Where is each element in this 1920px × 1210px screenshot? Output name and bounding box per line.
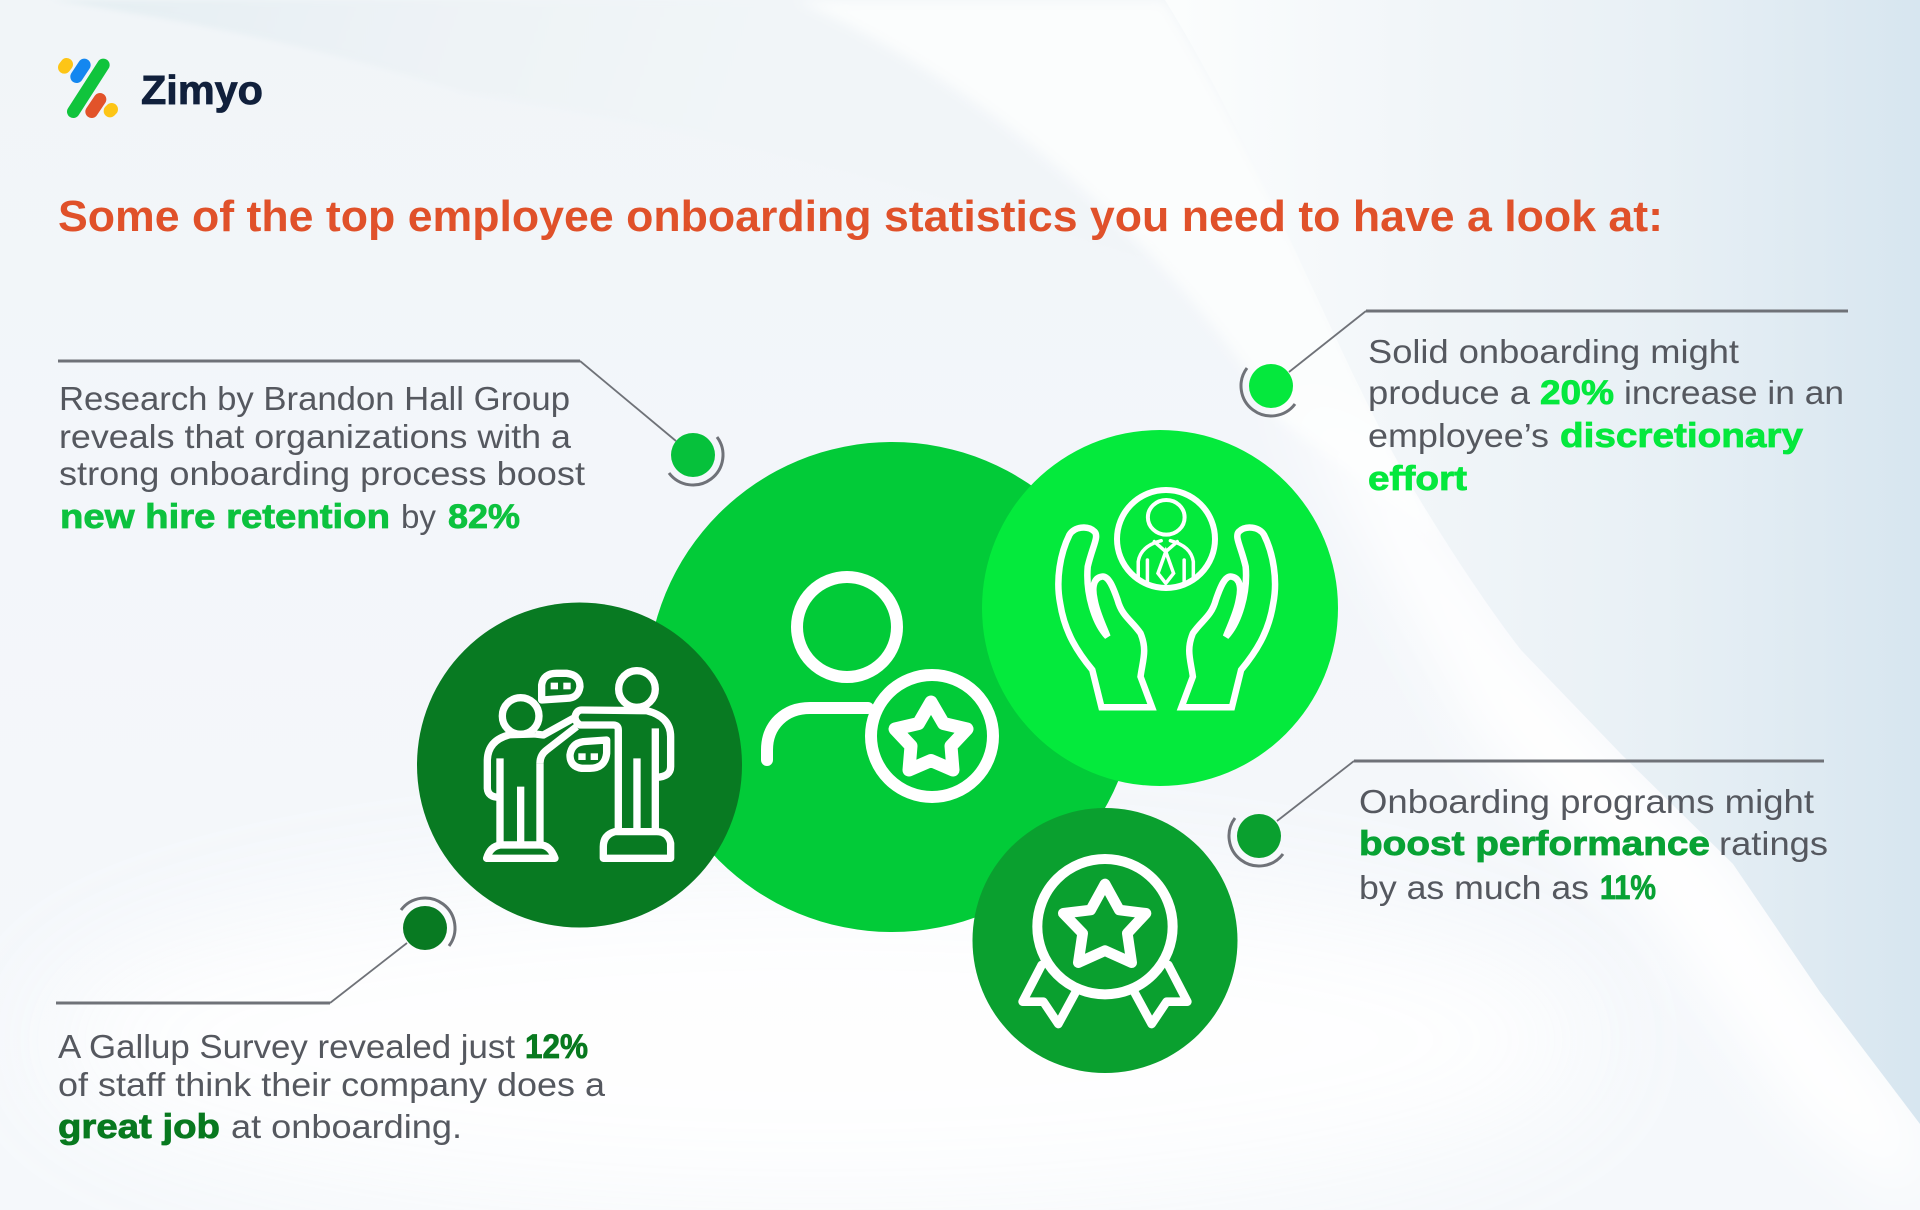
callout text: effort [1368, 460, 1467, 498]
icon: two people talking [487, 671, 671, 858]
callout text: reveals that organizations with a [59, 418, 572, 455]
icon: person with star badge [767, 577, 993, 797]
callout text: great job [58, 1108, 220, 1146]
marker dot [1241, 364, 1295, 416]
callout text: produce a [1368, 374, 1531, 411]
callout text: Solid onboarding might [1368, 333, 1739, 370]
logo: Zimyo [64, 64, 263, 113]
callout text [59, 380, 585, 536]
callout text [1368, 333, 1844, 498]
marker dot [401, 898, 455, 950]
connector line [58, 361, 676, 441]
title: Some of the top employee onboarding statistics you need to have a look at: [58, 192, 1663, 241]
callout text: employee’s [1368, 417, 1549, 454]
big circle: person with star [647, 442, 1137, 932]
callout text: boost performance [1359, 825, 1710, 863]
marker dot [1229, 814, 1283, 866]
callout text: by [401, 498, 436, 535]
callout text: new hire retention [60, 498, 390, 536]
icon: hands holding employee [1058, 490, 1275, 707]
callout text: 82% [448, 498, 520, 536]
callout text: ratings [1719, 825, 1828, 862]
callout: great job [56, 898, 606, 1146]
callout: new hire retention [58, 361, 723, 536]
callout text: 11% [1600, 869, 1656, 907]
callout: discretionary effort [1241, 311, 1848, 498]
callout text: A Gallup Survey revealed just [58, 1028, 515, 1065]
connector line [56, 943, 407, 1003]
callout text: discretionary [1560, 417, 1803, 455]
callout text: by as much as [1359, 869, 1589, 906]
callout text: at onboarding. [231, 1108, 462, 1145]
callout text: increase in an [1624, 374, 1844, 411]
light circle: hands holding employee [982, 430, 1338, 786]
icon: logo mark [64, 64, 112, 112]
logo wordmark: Zimyo [141, 67, 263, 113]
callout text [58, 1028, 606, 1146]
callout text [1359, 783, 1828, 907]
callout text: Onboarding programs might [1359, 783, 1814, 820]
marker dot [669, 433, 723, 485]
medal circle [972, 808, 1238, 1073]
callout text: of staff think their company does a [58, 1066, 606, 1103]
connector line [1289, 311, 1848, 372]
connector line [1277, 761, 1824, 821]
callout: boost performance [1229, 761, 1828, 907]
callout text: strong onboarding process boost [59, 455, 585, 492]
callout text: Research by Brandon Hall Group [59, 380, 570, 417]
callout text: 12% [525, 1028, 588, 1066]
icon: medal with star [1023, 859, 1187, 1024]
callout text: 20% [1540, 374, 1614, 412]
dark circle: people talking [417, 602, 742, 928]
